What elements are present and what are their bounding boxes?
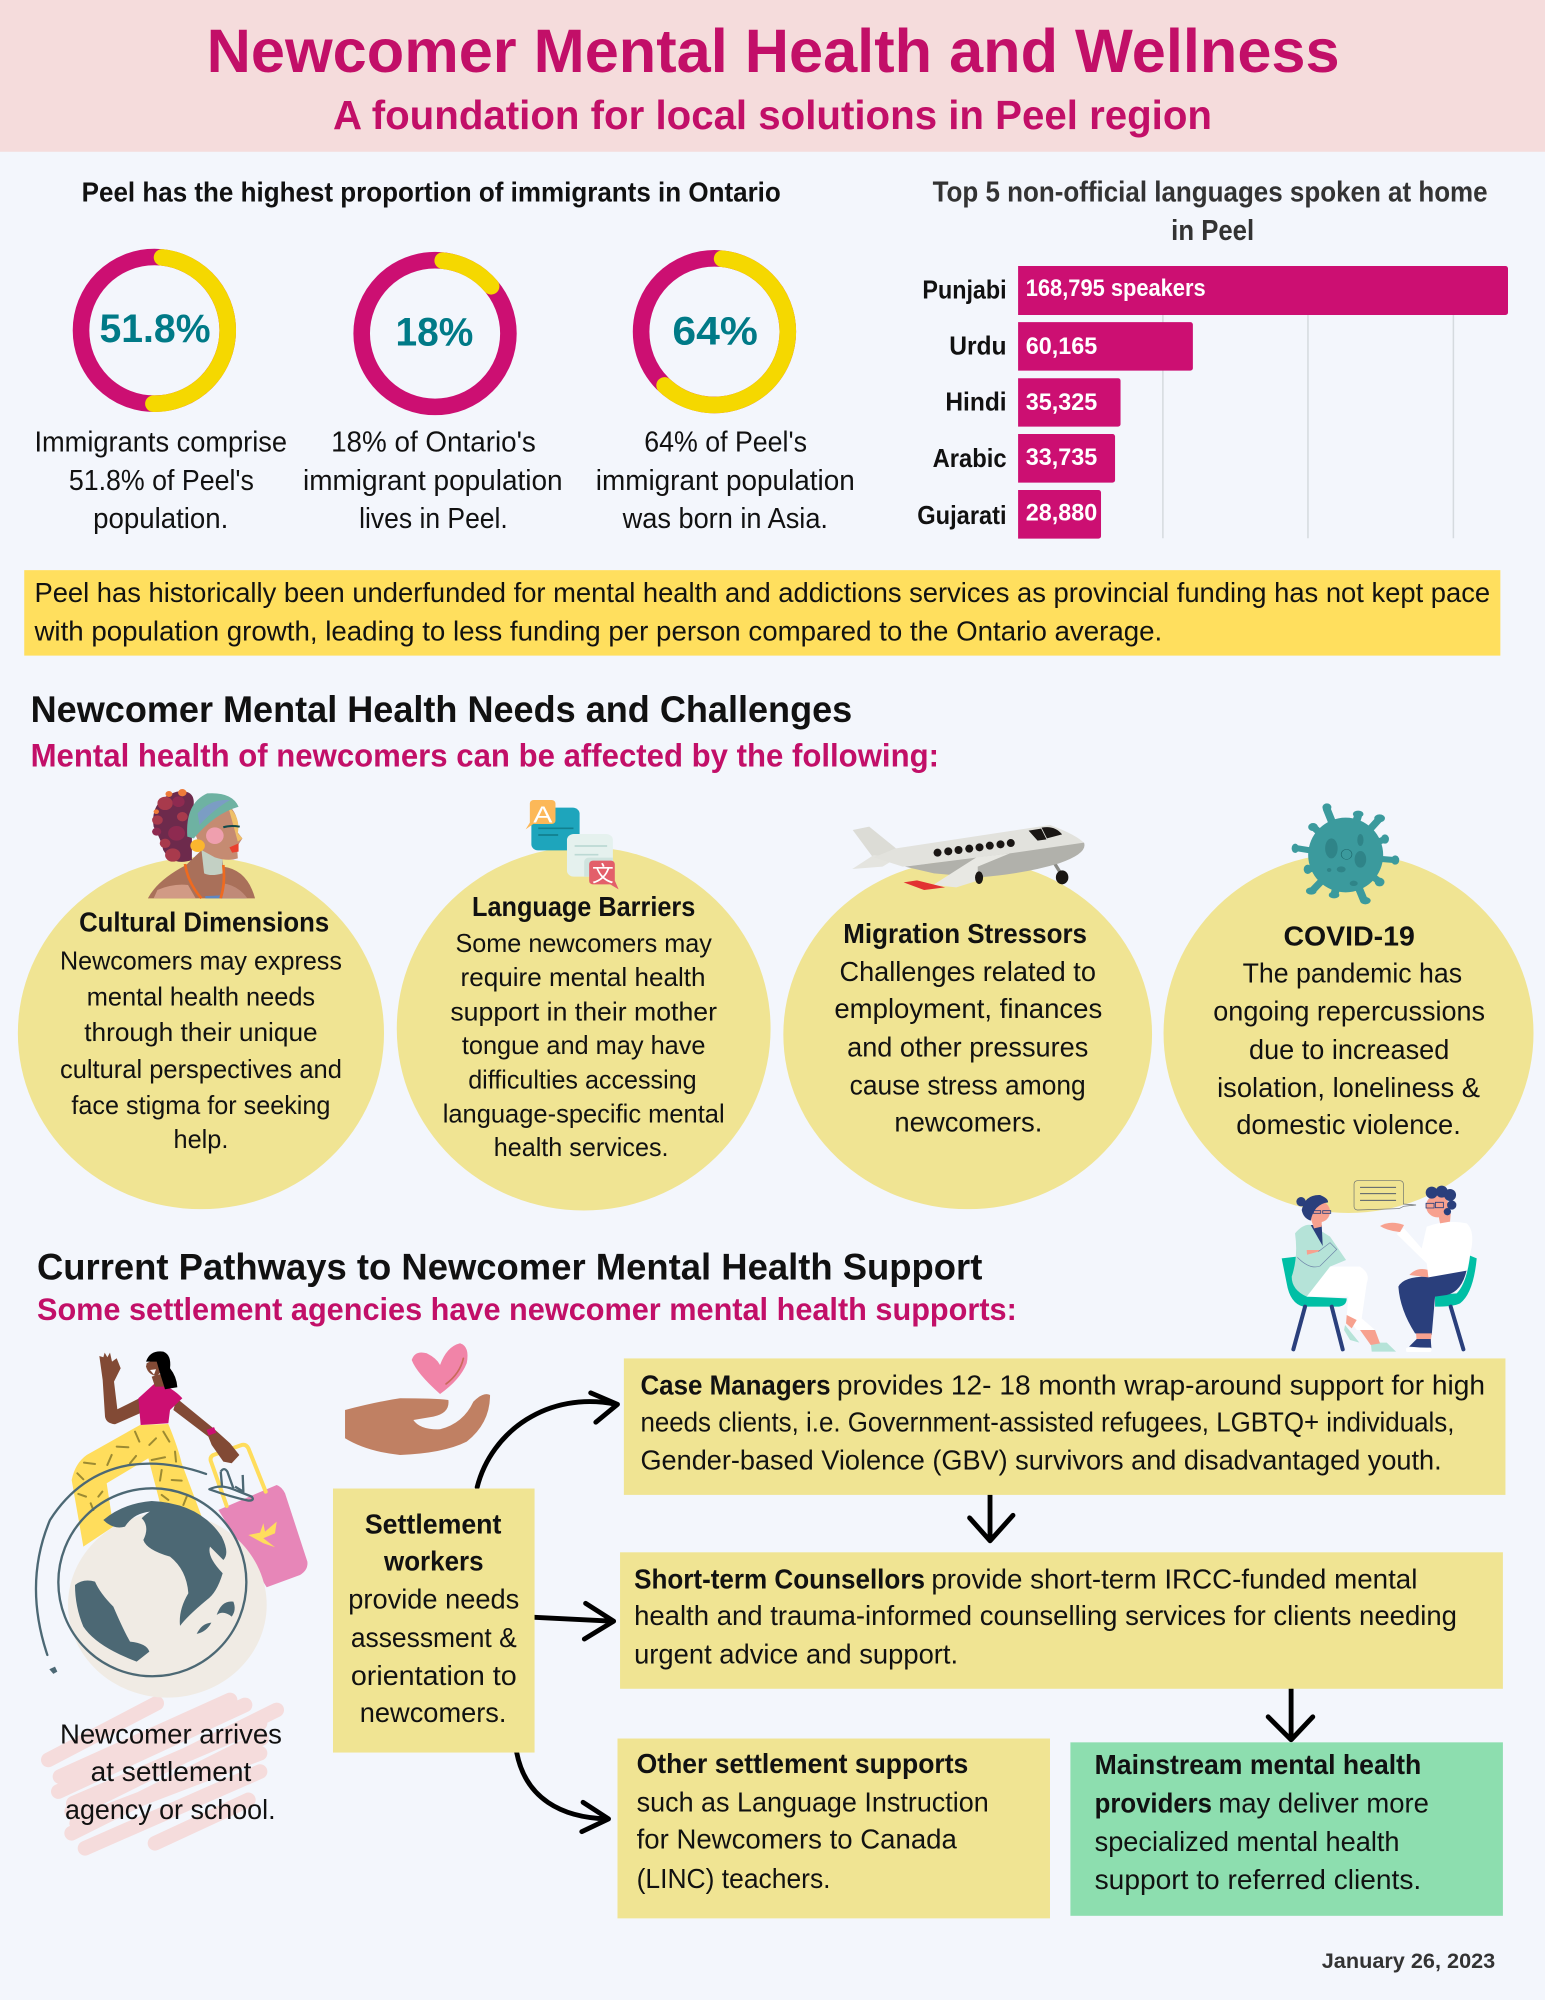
- icon: translation bubbles: 文: [592, 861, 614, 886]
- icon: translation bubbles: A: [533, 802, 553, 828]
- panel: short-term counsellors: [620, 1552, 1503, 1689]
- panel: mainstream providers: [1070, 1742, 1503, 1916]
- panel: settlement workers: orientation to: [351, 1660, 517, 1691]
- panel: case managers: Case Managers: [640, 1369, 831, 1400]
- bar chart: languages: [917, 266, 1508, 539]
- callout: underfunding: Peel has historically been underfunded for mental health and addictions services as provincial funding has not kept pace: [34, 577, 1490, 608]
- caption: 64%: 64% of Peel's: [644, 427, 807, 459]
- icon: virus: [1292, 803, 1399, 904]
- panel: settlement workers: Settlement: [365, 1508, 501, 1539]
- text: newcomer arrives: agency or school.: [65, 1794, 276, 1825]
- heading: current pathways: Current Pathways to Newcomer Mental Health Support: [37, 1246, 982, 1287]
- bar chart: languages: 28,880: [1026, 499, 1097, 525]
- date: January 26, 2023: [1322, 1950, 1495, 1973]
- subheading: settlement agencies: Some settlement agencies have newcomer mental health supports:: [37, 1291, 1017, 1327]
- panel: cultural dimensions: [18, 857, 384, 1209]
- panel: migration stressors: and other pressures: [847, 1031, 1088, 1062]
- donut: 64%: 64%: [672, 309, 758, 353]
- panel: case managers: provides 12- 18 month wrap-around support for high: [837, 1369, 1485, 1400]
- panel: covid-19: [1164, 853, 1534, 1213]
- icon: traveller on globe: [36, 1351, 307, 1848]
- panel: settlement workers: newcomers.: [360, 1697, 506, 1728]
- icon: hand with heart: [345, 1343, 490, 1455]
- bar chart: languages: Arabic: [933, 445, 1007, 473]
- heading: languages: [933, 177, 1488, 247]
- text: newcomer arrives: Newcomer arrives: [60, 1719, 282, 1750]
- arrow: case managers to counsellors: [970, 1495, 1013, 1541]
- bar chart: languages: 35,325: [1026, 389, 1097, 415]
- panel: language barriers: Some newcomers may: [455, 928, 713, 958]
- arrow: settlement to counsellors: [535, 1603, 614, 1639]
- arrow: settlement to other supports: [517, 1753, 609, 1832]
- panel: mainstream providers: specialized mental health: [1095, 1826, 1400, 1857]
- caption: 18%: [303, 427, 563, 535]
- subtitle: A foundation for local solutions in Peel region: [333, 92, 1212, 138]
- callout: underfunding: with population growth, leading to less funding per person compared to the Ontario average.: [33, 615, 1162, 646]
- caption: 18%: 18% of Ontario's: [331, 427, 536, 459]
- panel: language barriers: [397, 847, 771, 1210]
- panel: settlement workers: provide needs: [348, 1584, 519, 1615]
- panel: migration stressors: [783, 860, 1152, 1209]
- panel: covid-19: due to increased: [1249, 1034, 1449, 1065]
- panel: mainstream providers: may deliver more: [1218, 1788, 1429, 1818]
- panel: settlement workers: [333, 1489, 535, 1753]
- panel: other settlement supports: Other settlement supports: [637, 1748, 968, 1779]
- panel: case managers: needs clients, i.e. Government-assisted refugees, LGBTQ+ individuals,: [640, 1406, 1454, 1437]
- arrow: counsellors to mainstream: [1268, 1689, 1313, 1740]
- bar chart: languages: Hindi: [945, 389, 1007, 417]
- caption: 51.8%: population.: [93, 503, 228, 535]
- panel: cultural dimensions: Newcomers may express: [60, 946, 342, 976]
- bar chart: languages: Punjabi: [922, 276, 1007, 304]
- donut: 64%: [634, 251, 795, 412]
- heading: languages: Top 5 non-official languages spoken at home: [933, 177, 1488, 209]
- panel: other settlement supports: [617, 1739, 1050, 1918]
- panel: settlement workers: workers: [383, 1545, 484, 1576]
- panel: covid-19: COVID-19: [1283, 920, 1415, 951]
- header band: [0, 0, 1545, 152]
- panel: case managers: Gender-based Violence (GBV) survivors and disadvantaged youth.: [640, 1445, 1442, 1476]
- panel: covid-19: The pandemic has: [1243, 957, 1462, 988]
- subheading: affected by: Mental health of newcomers can be affected by the following:: [31, 738, 939, 774]
- caption: 64%: immigrant population: [596, 465, 855, 497]
- bar chart: languages: Gujarati: [917, 502, 1007, 530]
- caption: 18%: lives in Peel.: [359, 503, 508, 535]
- panel: cultural dimensions: mental health needs: [87, 981, 315, 1011]
- heading: needs and challenges: Newcomer Mental Health Needs and Challenges: [31, 689, 852, 730]
- panel: settlement workers: assessment &: [351, 1622, 517, 1653]
- panel: short-term counsellors: urgent advice and support.: [634, 1639, 958, 1670]
- bar chart: languages: 168,795 speakers: [1026, 275, 1206, 301]
- panel: language barriers: support in their mother: [450, 997, 717, 1027]
- heading: languages: in Peel: [1171, 215, 1254, 247]
- panel: cultural dimensions: cultural perspectives and: [60, 1054, 342, 1084]
- panel: language barriers: health services.: [494, 1132, 669, 1162]
- icon: airplane: [852, 825, 1084, 890]
- icon: counselling session: [1282, 1181, 1477, 1352]
- panel: short-term counsellors: Short-term Counsellors: [634, 1563, 925, 1594]
- panel: covid-19: ongoing repercussions: [1213, 996, 1485, 1027]
- panel: language barriers: language-specific mental: [443, 1099, 725, 1129]
- panel: other settlement supports: such as Language Instruction: [637, 1786, 989, 1817]
- callout: underfunding: [24, 570, 1500, 656]
- panel: short-term counsellors: provide short-term IRCC-funded mental: [931, 1563, 1417, 1594]
- panel: language barriers: difficulties accessing: [468, 1064, 697, 1094]
- panel: language barriers: Language Barriers: [472, 891, 695, 922]
- bar chart: languages: 33,735: [1026, 444, 1097, 470]
- panel: migration stressors: cause stress among: [850, 1070, 1086, 1101]
- panel: covid-19: domestic violence.: [1236, 1109, 1461, 1140]
- text: newcomer arrives: [60, 1719, 282, 1825]
- caption: 64%: [596, 427, 855, 535]
- bar chart: languages: Urdu: [949, 333, 1007, 361]
- panel: cultural dimensions: face stigma for seeking: [71, 1090, 330, 1120]
- panel: cultural dimensions: Cultural Dimensions: [79, 906, 329, 937]
- donut: 18%: 18%: [395, 311, 473, 355]
- panel: case managers: [624, 1358, 1505, 1495]
- panel: cultural dimensions: through their unique: [84, 1017, 318, 1047]
- panel: mainstream providers: Mainstream mental health: [1095, 1749, 1421, 1780]
- caption: 18%: immigrant population: [303, 465, 563, 497]
- title: Newcomer Mental Health and Wellness: [207, 17, 1340, 85]
- panel: migration stressors: employment, finances: [834, 993, 1102, 1024]
- caption: 51.8%: Immigrants comprise: [34, 427, 287, 459]
- text: newcomer arrives: at settlement: [91, 1756, 252, 1787]
- donut: 18%: [354, 253, 516, 414]
- panel: cultural dimensions: help.: [174, 1124, 228, 1154]
- panel: migration stressors: Challenges related to: [839, 956, 1096, 987]
- icon: woman portrait: [148, 789, 255, 898]
- heading: immigrants: Peel has the highest proportion of immigrants in Ontario: [82, 177, 781, 208]
- panel: other settlement supports: for Newcomers to Canada: [637, 1823, 957, 1854]
- donut: 51.8%: [74, 250, 235, 411]
- panel: short-term counsellors: health and trauma-informed counselling services for clients needing: [634, 1600, 1457, 1631]
- panel: mainstream providers: providers: [1095, 1788, 1212, 1818]
- arrow: settlement to case managers: [477, 1393, 617, 1487]
- panel: migration stressors: Migration Stressors: [843, 918, 1087, 949]
- caption: 51.8%: [34, 427, 287, 535]
- panel: language barriers: tongue and may have: [462, 1030, 706, 1060]
- panel: other settlement supports: (LINC) teachers.: [637, 1863, 831, 1894]
- panel: migration stressors: newcomers.: [894, 1107, 1042, 1138]
- donut: 51.8%: 51.8%: [100, 307, 211, 351]
- panel: language barriers: require mental health: [461, 962, 706, 992]
- bar chart: languages: 60,165: [1026, 333, 1097, 359]
- caption: 51.8%: 51.8% of Peel's: [69, 465, 254, 497]
- caption: 64%: was born in Asia.: [622, 503, 828, 535]
- icon: translation bubbles: [526, 800, 619, 889]
- panel: covid-19: isolation, loneliness &: [1217, 1072, 1480, 1103]
- panel: mainstream providers: support to referred clients.: [1095, 1864, 1421, 1895]
